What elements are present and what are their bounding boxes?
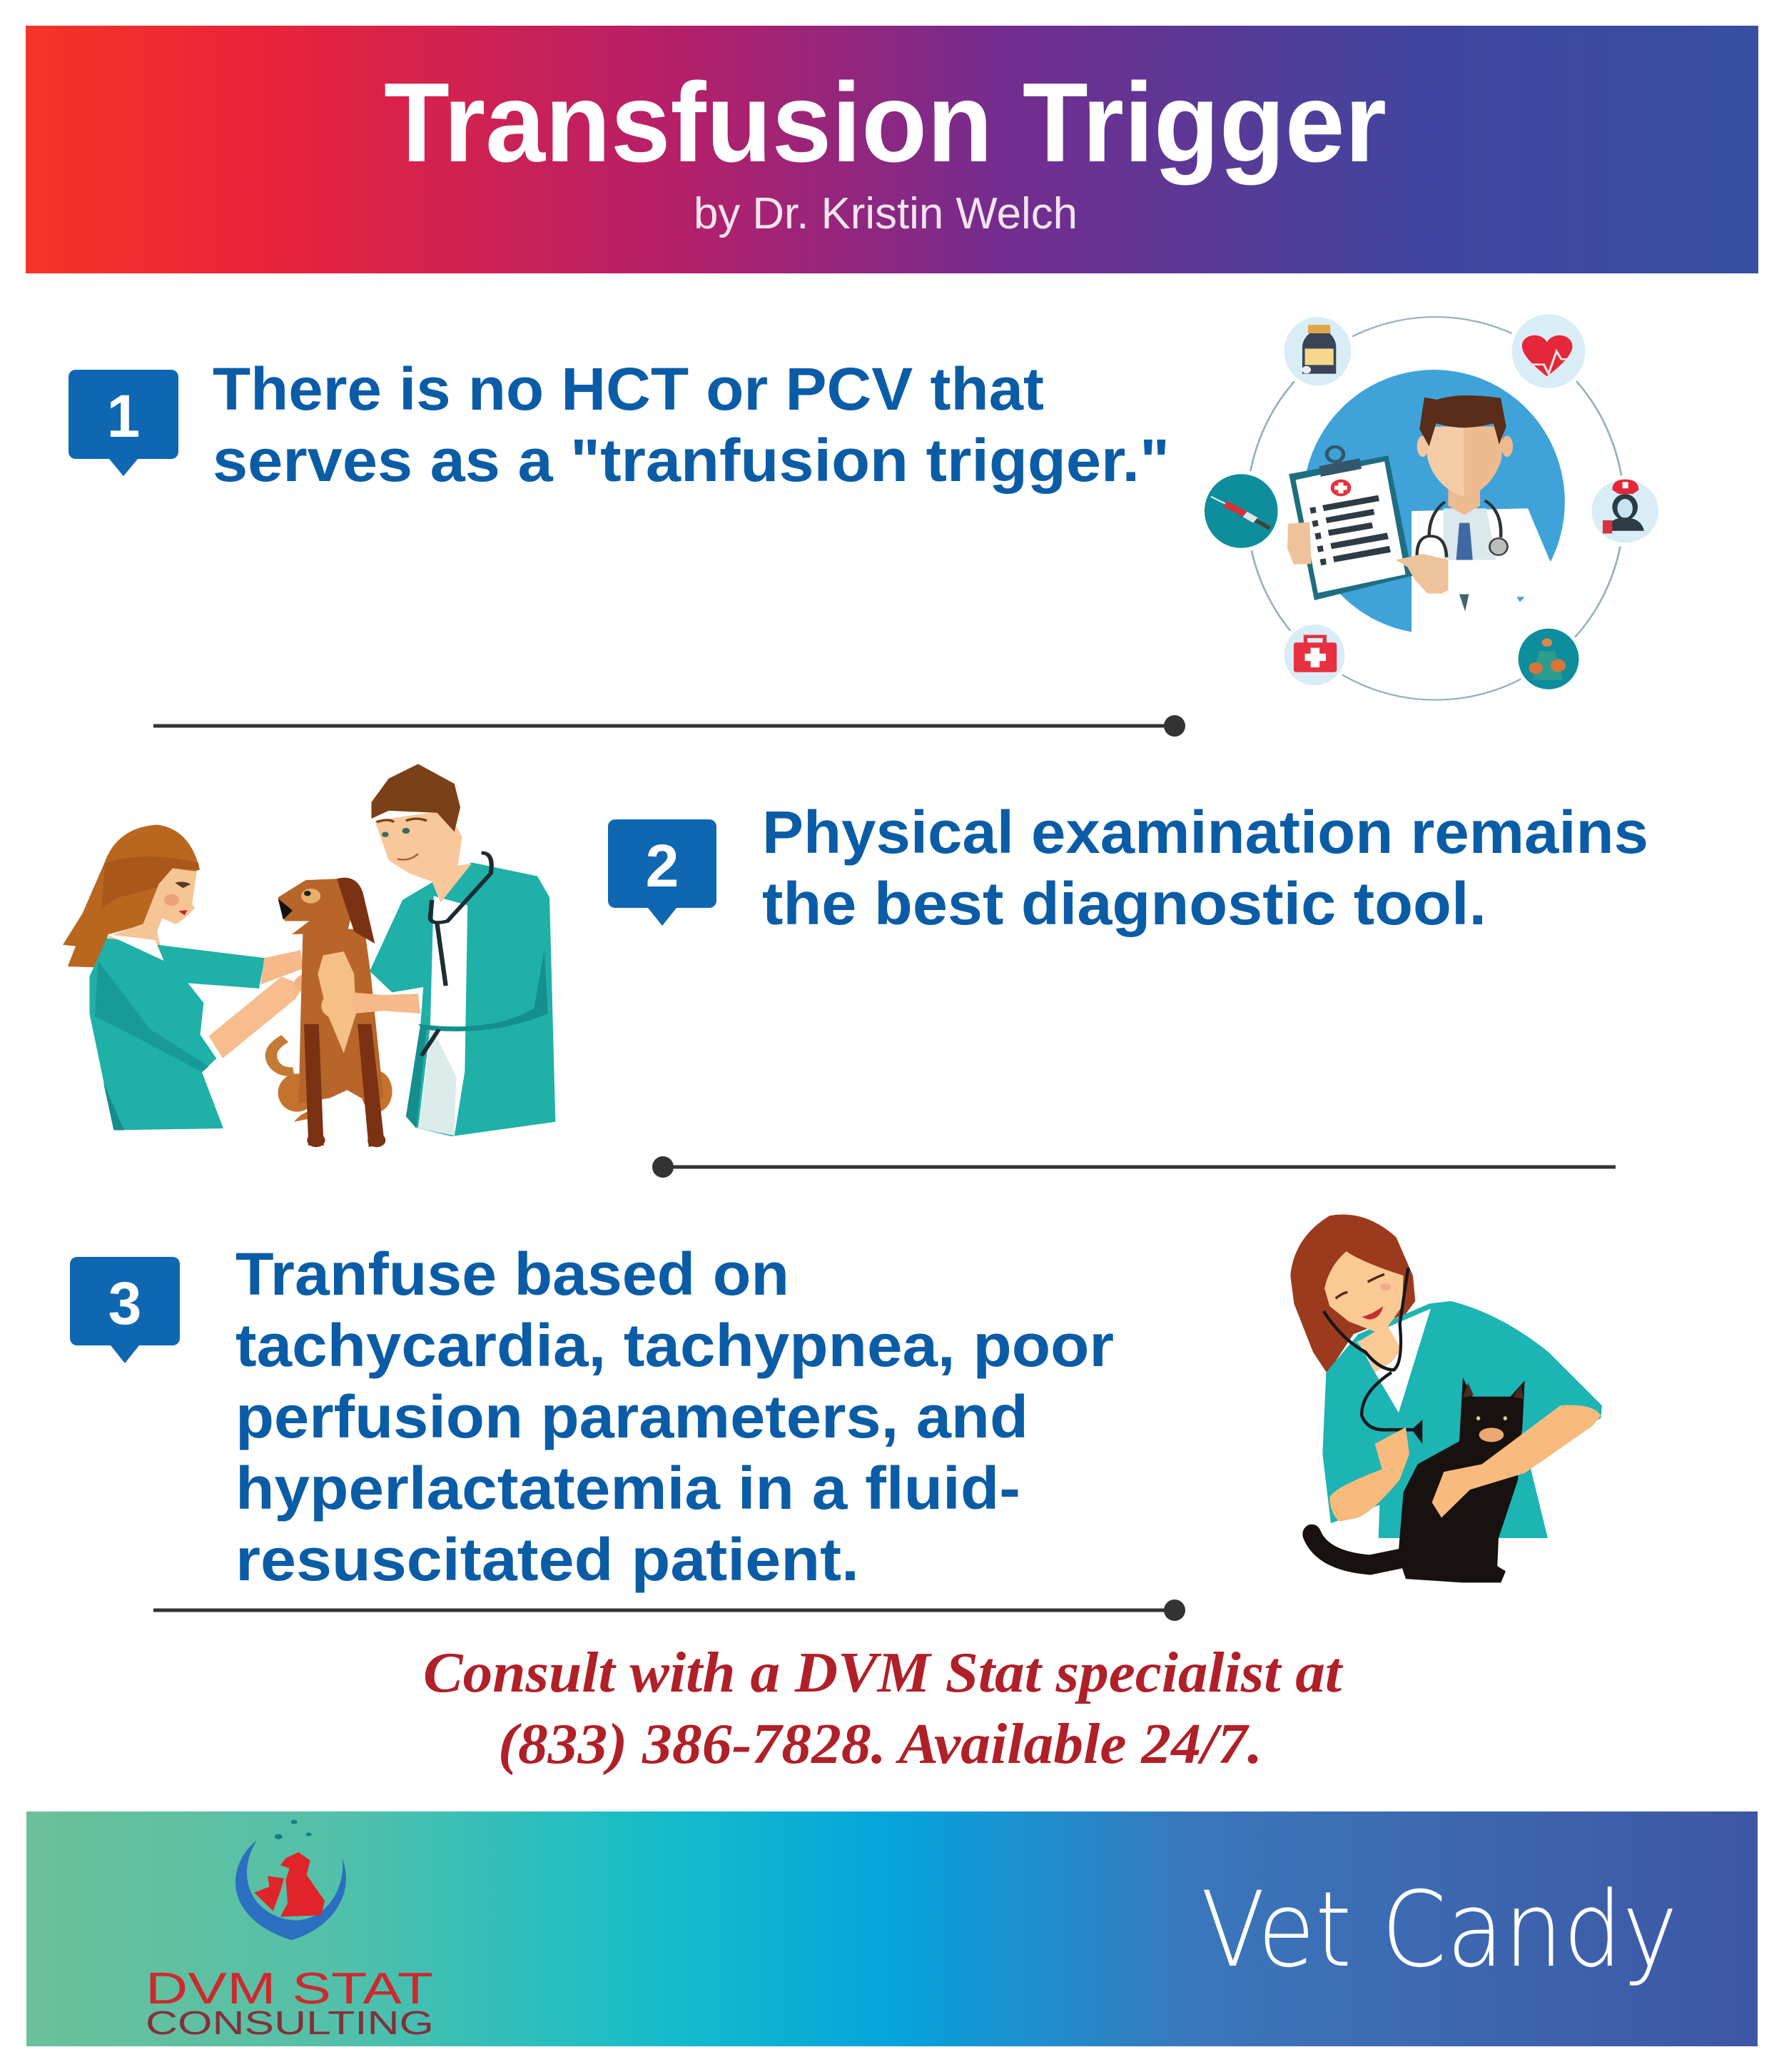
clipboard	[1289, 447, 1412, 600]
icon: heart with pulse	[1508, 310, 1589, 393]
badge 3	[70, 1257, 180, 1363]
divider 2	[652, 1156, 1616, 1178]
icon: medicine bottle	[1280, 313, 1355, 390]
hair	[1290, 1215, 1415, 1374]
callout: consult line: Consult with a DVM Stat specialist at	[423, 1642, 1344, 1704]
point 2 text: the best diagnostic tool.	[762, 870, 1486, 937]
man vet	[321, 764, 555, 1136]
divider 3	[153, 1600, 1185, 1621]
icon: nurse	[1588, 475, 1663, 547]
point 3 text: hyperlactatemia in a fluid-	[235, 1455, 1020, 1522]
dog	[271, 878, 392, 1147]
illustration: two vets examining dog	[63, 764, 555, 1147]
scrubs	[1322, 1301, 1602, 1538]
badge 3: 3	[108, 1270, 141, 1337]
hands	[1287, 522, 1448, 593]
badge 1	[69, 370, 178, 476]
illustration: vet with black cat	[1290, 1215, 1602, 1582]
callout: consult line: (833) 386-7828. Available 24/7.	[498, 1713, 1262, 1776]
Vet Candy wordmark: Vet Candy	[1201, 1869, 1678, 1991]
point 1 text: serves as a "tranfusion trigger."	[213, 427, 1170, 494]
point 3 text: resuscitated patient.	[235, 1526, 859, 1593]
woman vet	[63, 824, 328, 1131]
illustration: doctor with clipboard in ring of icons	[1200, 310, 1663, 700]
badge 2: 2	[646, 832, 679, 899]
point 2 text: Physical examination remains	[762, 799, 1648, 866]
point 2 text	[762, 799, 1648, 937]
callout: consult line	[423, 1642, 1344, 1776]
hand with chest piece	[1329, 1427, 1409, 1522]
point 3 text: tachycardia, tachypnea, poor	[235, 1312, 1114, 1379]
arm holding cat	[1432, 1405, 1601, 1517]
point 3 text	[235, 1240, 1114, 1593]
point 1 text: There is no HCT or PCV that	[213, 355, 1044, 423]
byline: by Dr. Kristin Welch	[694, 189, 1078, 238]
footer banner	[26, 1811, 1758, 2046]
stethoscope	[1324, 1268, 1415, 1430]
divider 1	[153, 715, 1185, 737]
DVM Stat logo: CONSULTING	[146, 2004, 434, 2041]
point 1 text	[213, 355, 1170, 494]
icon: vet with pets	[1514, 625, 1583, 693]
face	[1324, 1251, 1404, 1373]
badge 2	[608, 819, 716, 926]
header banner	[26, 26, 1758, 273]
collar	[1358, 1309, 1431, 1413]
cat	[1312, 1378, 1525, 1582]
icon: first aid kit	[1280, 621, 1349, 689]
doctor figure	[1303, 370, 1568, 640]
badge 1: 1	[107, 383, 140, 450]
DVM Stat logo	[146, 1820, 434, 2041]
title: Transfusion Trigger	[384, 60, 1387, 186]
point 3 text: Tranfuse based on	[235, 1240, 789, 1308]
DVM Stat logo: DVM STAT	[146, 1964, 433, 2013]
point 3 text: perfusion parameters, and	[235, 1383, 1028, 1450]
icon: syringe	[1200, 470, 1282, 552]
